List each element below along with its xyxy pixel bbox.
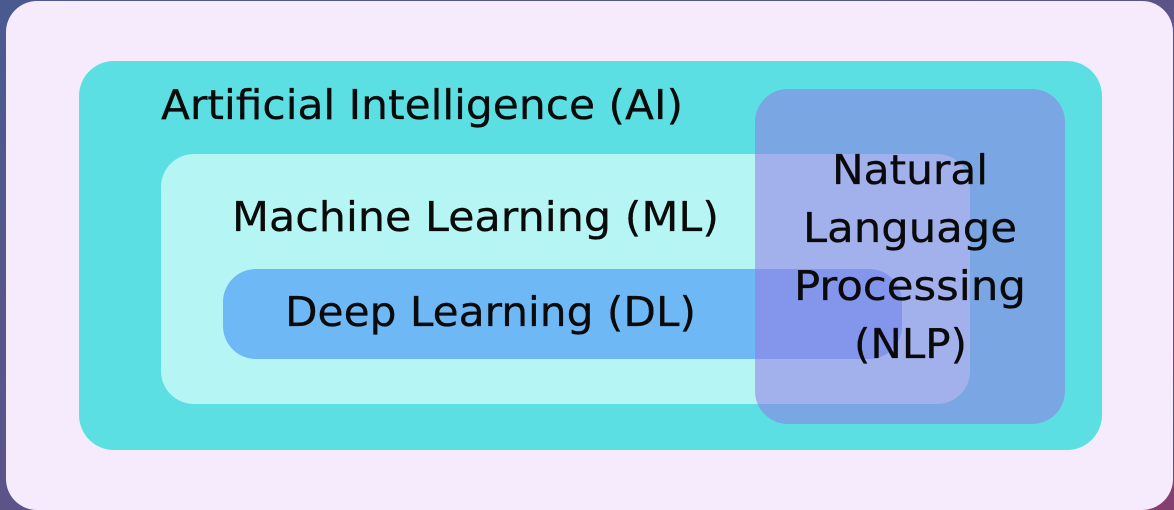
heading: Deep Learning: Deep Learning (DL): [285, 288, 696, 336]
heading: Artificial Intelligence: Artificial Intelligence (AI): [161, 81, 683, 129]
panel: Natural Language Processing: [755, 89, 1065, 424]
heading: Natural Language Processing: Natural: [832, 146, 988, 194]
panel: Deep Learning: [223, 269, 902, 359]
heading: Natural Language Processing: Language: [803, 204, 1017, 252]
heading: Natural Language Processing: (NLP): [854, 320, 967, 368]
heading: Machine Learning: Machine Learning (ML): [232, 193, 719, 241]
heading: Natural Language Processing: [794, 146, 1026, 368]
heading: Natural Language Processing: Processing: [794, 262, 1026, 310]
